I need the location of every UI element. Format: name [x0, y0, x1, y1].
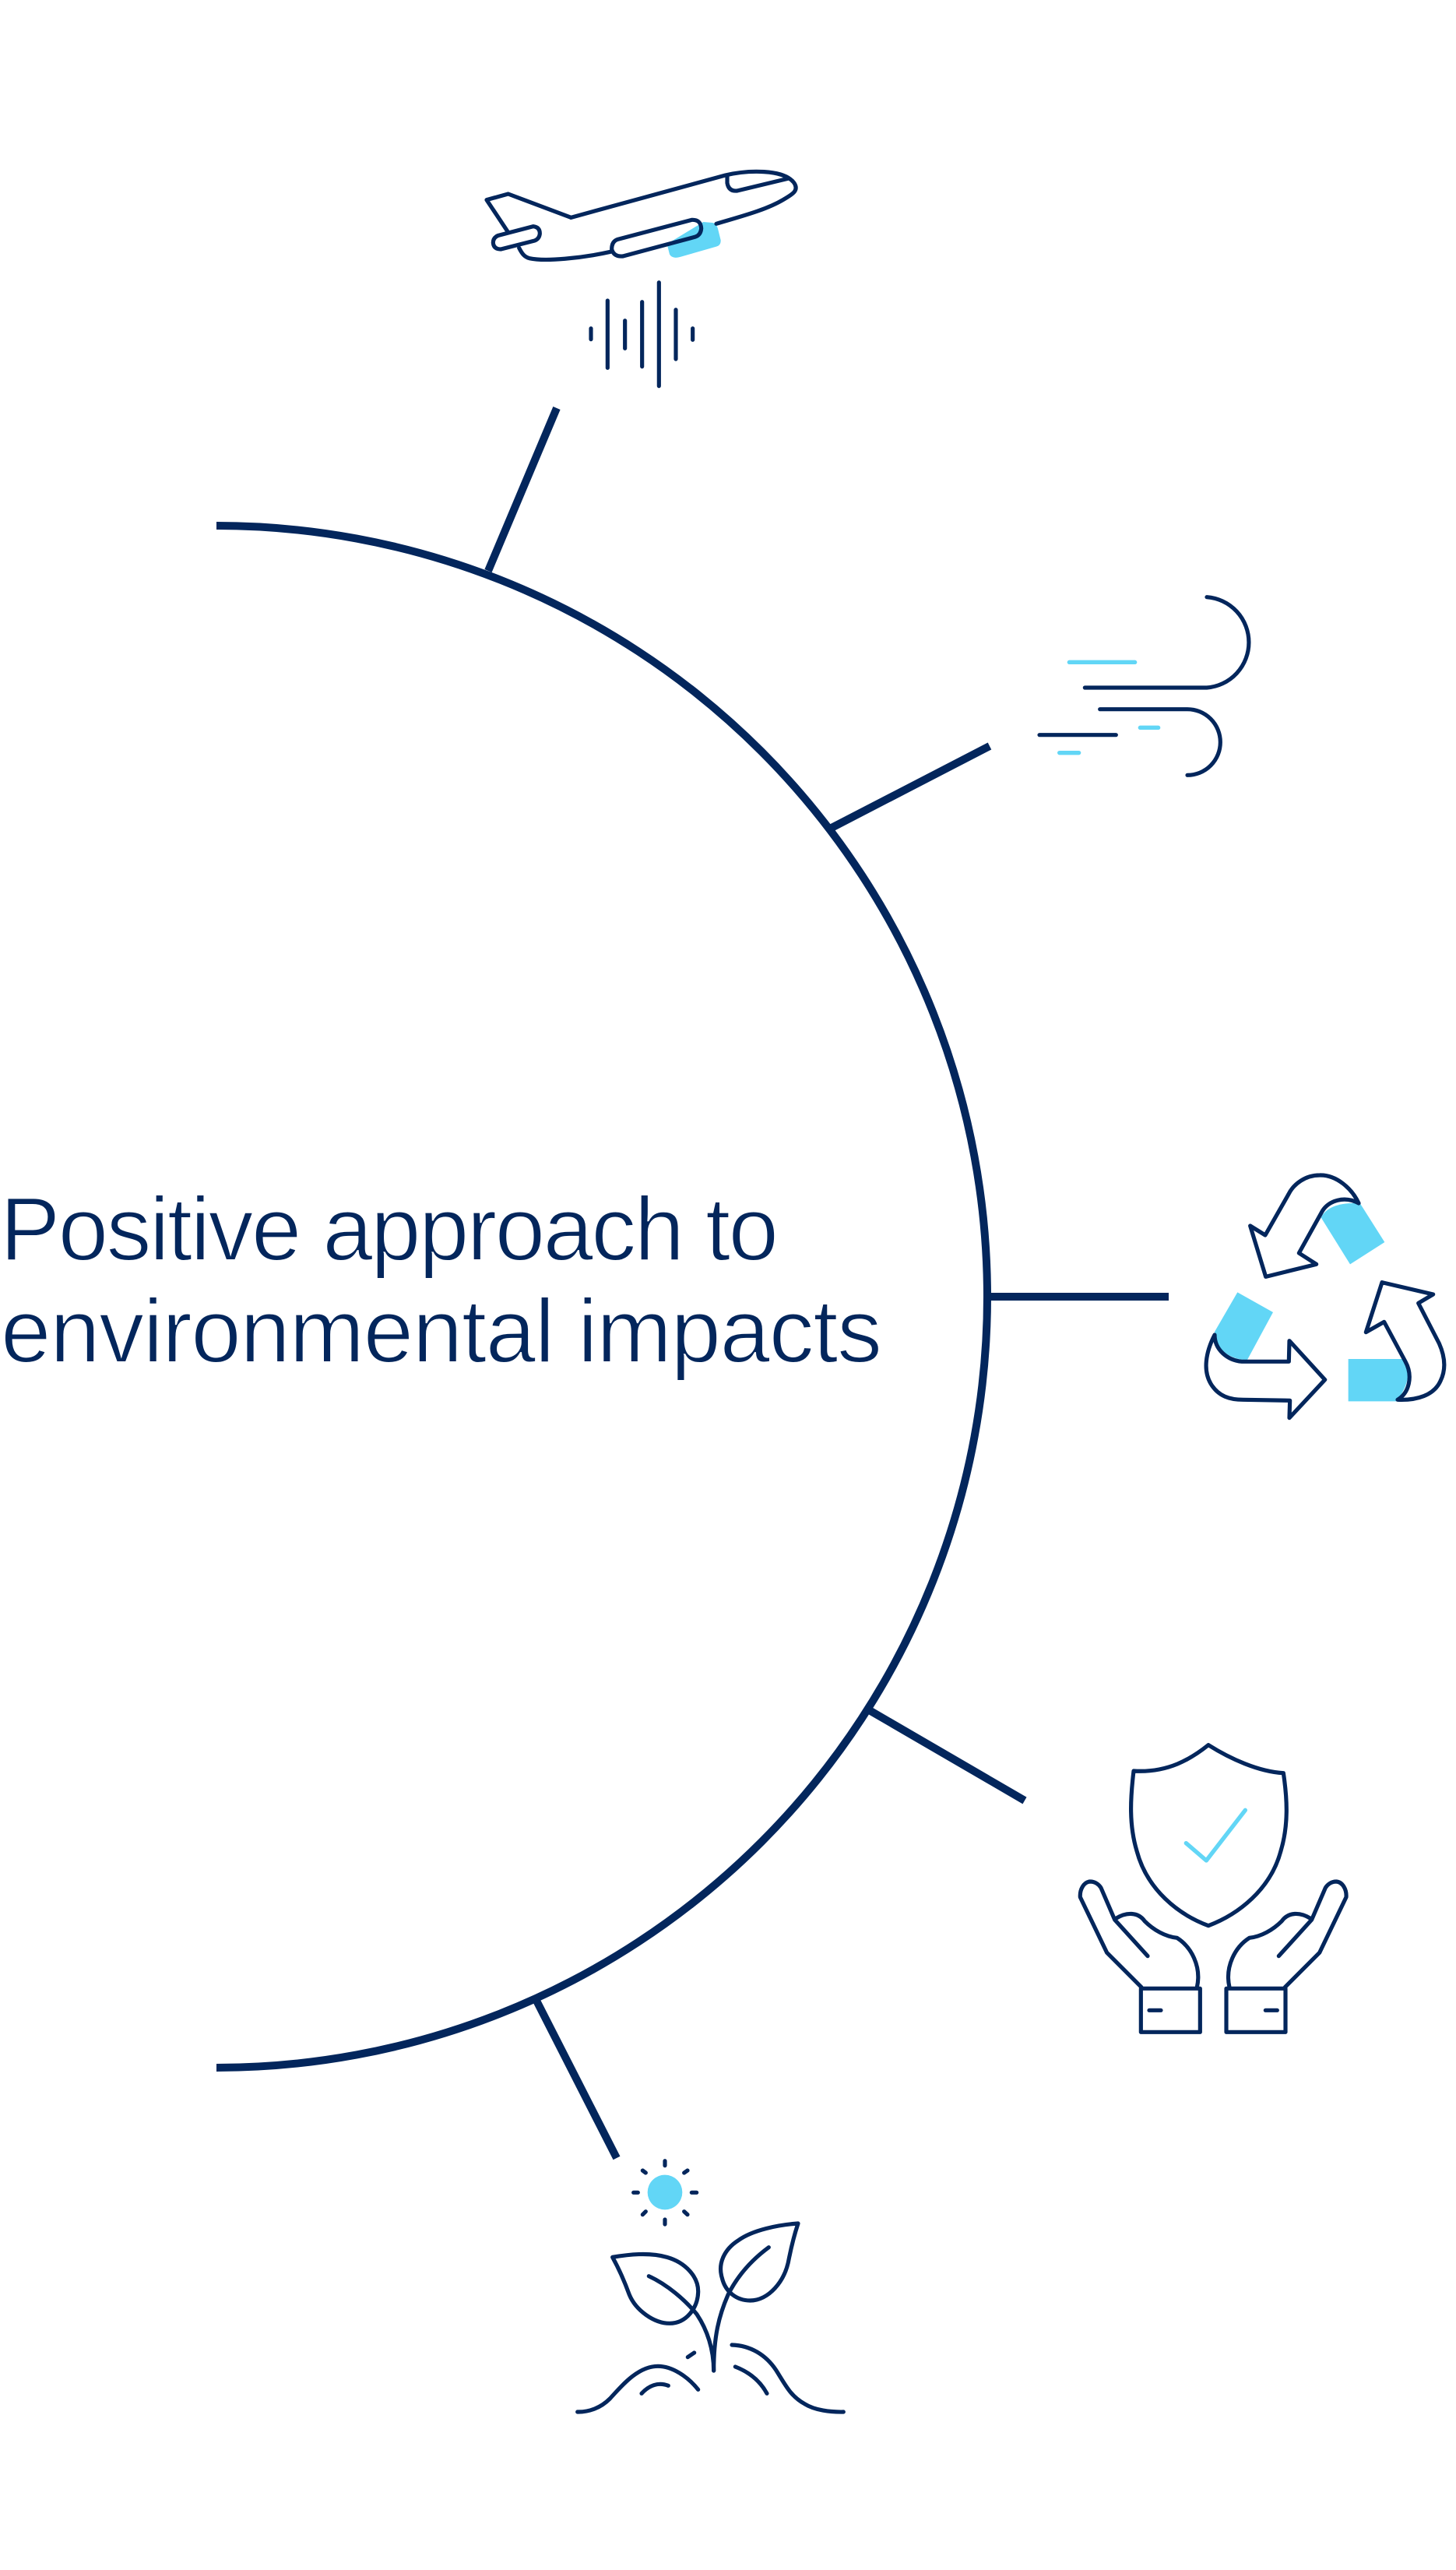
title — [0, 1178, 882, 1382]
leaves and stem — [613, 2223, 798, 2371]
right hand — [1226, 1882, 1346, 2032]
semicircle arc — [216, 526, 987, 2068]
engine highlight — [667, 222, 721, 258]
icon: wind — [1039, 597, 1249, 775]
shield — [1131, 1745, 1286, 1926]
spoke: to recycling icon — [986, 1293, 1169, 1301]
sound wave bars — [591, 283, 693, 386]
title: environmental impacts — [1, 1280, 882, 1382]
airplane outline — [487, 171, 796, 259]
soil — [578, 2345, 843, 2412]
icon: seedling with sun — [578, 2161, 843, 2412]
spoke: to wind icon — [830, 746, 990, 829]
icon: recycling arrows — [1206, 1175, 1444, 1418]
spoke: to aircraft noise icon — [488, 408, 557, 571]
icon: airplane with sound waves — [487, 171, 796, 386]
title: Positive approach to — [0, 1178, 779, 1280]
check mark — [1186, 1810, 1245, 1861]
icon: hands holding shield — [1080, 1745, 1346, 2032]
spoke: to plant icon — [534, 1996, 617, 2158]
spoke: to protection icon — [867, 1709, 1025, 1801]
left hand — [1080, 1882, 1200, 2032]
sun — [634, 2161, 697, 2224]
